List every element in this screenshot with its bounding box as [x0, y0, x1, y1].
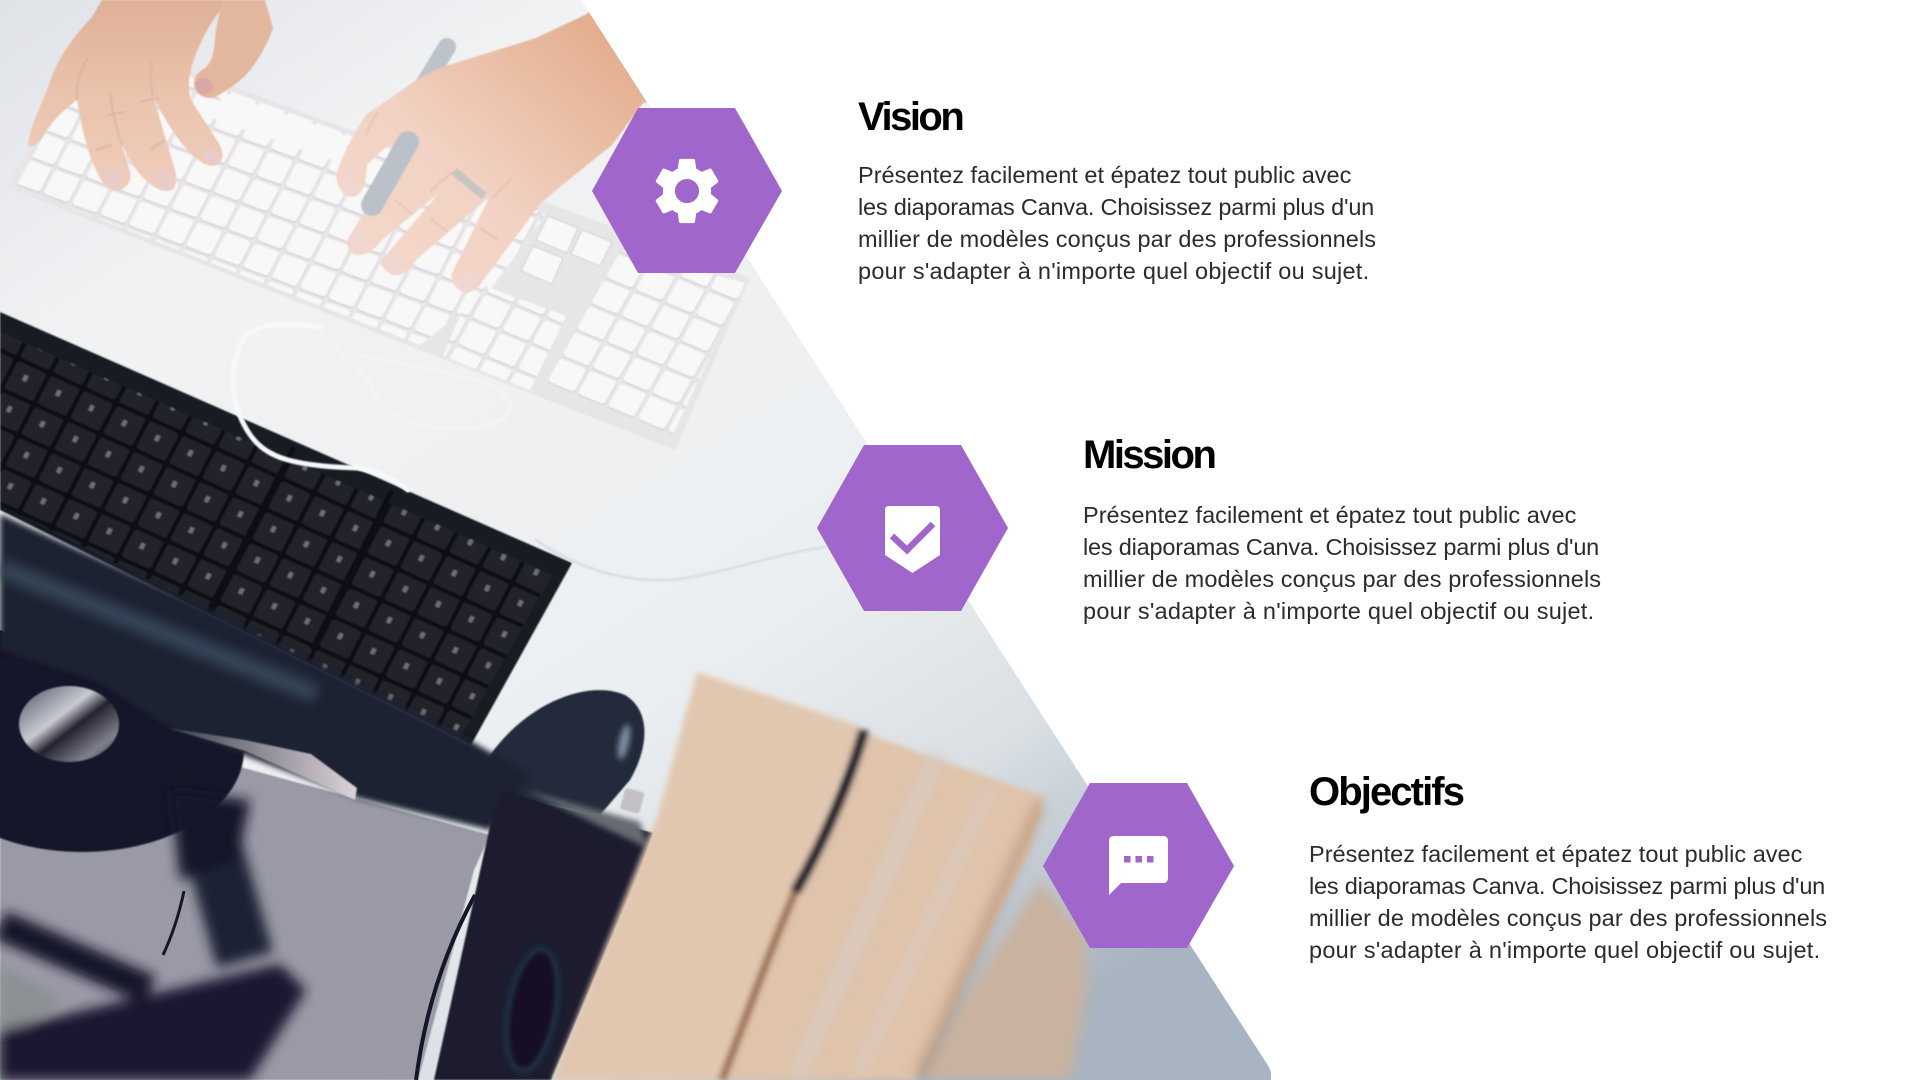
- books: [552, 672, 1088, 1080]
- hand and fingers: [337, 0, 660, 292]
- icon: vision hexagon with gear: [592, 108, 782, 273]
- text block: vision: [858, 95, 1376, 284]
- paper strip: [168, 728, 357, 800]
- arrow keys: [521, 216, 612, 284]
- monitor light band: [0, 568, 316, 694]
- speaker top silver edge: [525, 790, 648, 848]
- thumb: [194, 0, 273, 98]
- paragraph: objectifs: [1309, 841, 1827, 963]
- heading: objectifs: Objectifs: [1309, 770, 1463, 814]
- finger creases: [77, 58, 165, 150]
- knuckle creases: [366, 112, 512, 240]
- numeric key block: [545, 250, 745, 436]
- mouse highlight: [615, 723, 633, 761]
- paragraph: vision: pour s'adapter à n'importe quel objectif ou sujet.: [858, 258, 1369, 284]
- paragraph: objectifs: pour s'adapter à n'importe quel objectif ou sujet.: [1309, 937, 1820, 963]
- blurred object bottom left: [0, 964, 306, 1080]
- book page streaks: [800, 760, 1040, 1075]
- thin black cables: [163, 891, 475, 1080]
- heading: mission: Mission: [1083, 433, 1214, 477]
- monitor body: [0, 514, 530, 830]
- navigation key block: [443, 282, 566, 390]
- key block gaps: [208, 447, 392, 649]
- text block: mission: [1083, 433, 1601, 624]
- desk surface: [0, 0, 1271, 1080]
- speaker box: [434, 788, 653, 1080]
- paragraph: vision: les diaporamas Canva. Choisissez parmi plus d'un: [858, 194, 1374, 220]
- photo: desk with keyboards, hands and books, clipped by diagonal: [0, 0, 1271, 1080]
- first book: [552, 672, 862, 1080]
- grey desk below the monitor: [0, 765, 490, 1080]
- pen upper part: [422, 47, 447, 88]
- text block: objectifs: [1309, 770, 1827, 963]
- left hand: [28, 0, 273, 194]
- main key block: [17, 76, 544, 345]
- hand and fingers: [28, 0, 230, 191]
- lamp round base: [0, 744, 245, 853]
- black mouse: [480, 690, 644, 815]
- monitor foreground: [0, 514, 530, 830]
- keyboard cable: [233, 324, 825, 580]
- paragraph: mission: les diaporamas Canva. Choisissez parmi plus d'un: [1083, 534, 1599, 560]
- grey wedge: [0, 965, 65, 1040]
- lower left arm: [0, 925, 150, 990]
- fingernails: [102, 78, 223, 194]
- paragraph: mission: pour s'adapter à n'importe quel objectif ou sujet.: [1083, 598, 1594, 624]
- spine fade: [722, 892, 795, 1080]
- keyboard body: [72, 96, 749, 449]
- dark spine: [795, 730, 864, 892]
- second book: [715, 732, 1045, 1080]
- pen lower part: [372, 142, 408, 205]
- icon: mission hexagon with check shield: [817, 445, 1008, 611]
- speaker port: [498, 945, 566, 1075]
- paragraph: vision: Présentez facilement et épatez tout public avec: [858, 162, 1351, 188]
- stand fixing: [170, 790, 250, 880]
- wedding ring: [454, 171, 484, 196]
- keys: [0, 332, 552, 738]
- paragraph: objectifs: les diaporamas Canva. Choisissez parmi plus d'un: [1309, 873, 1825, 899]
- speaker knob: [620, 788, 645, 814]
- third book: [915, 880, 1088, 1080]
- fingernails: [342, 173, 476, 293]
- lamp dark surround: [0, 630, 26, 664]
- paragraph: objectifs: millier de modèles conçus par des professionnels: [1309, 905, 1827, 931]
- black keyboard: [0, 312, 572, 745]
- heading: vision: Vision: [858, 95, 962, 139]
- paragraph: objectifs: Présentez facilement et épatez tout public avec: [1309, 841, 1802, 867]
- long top bar key: [214, 94, 348, 160]
- monitor stand arm: [0, 790, 306, 1080]
- right hand: [337, 0, 660, 293]
- icon: objectifs hexagon with chat bubble: [1043, 783, 1234, 948]
- chrome knob: [19, 686, 119, 762]
- paragraph: mission: [1083, 502, 1601, 624]
- paragraph: mission: millier de modèles conçus par des professionnels: [1083, 566, 1601, 592]
- paragraph: vision: millier de modèles conçus par des professionnels: [858, 226, 1376, 252]
- paragraph: mission: Présentez facilement et épatez tout public avec: [1083, 502, 1576, 528]
- white keyboard: [16, 77, 749, 449]
- paragraph: vision: [858, 162, 1376, 284]
- keyboard body: [0, 312, 572, 745]
